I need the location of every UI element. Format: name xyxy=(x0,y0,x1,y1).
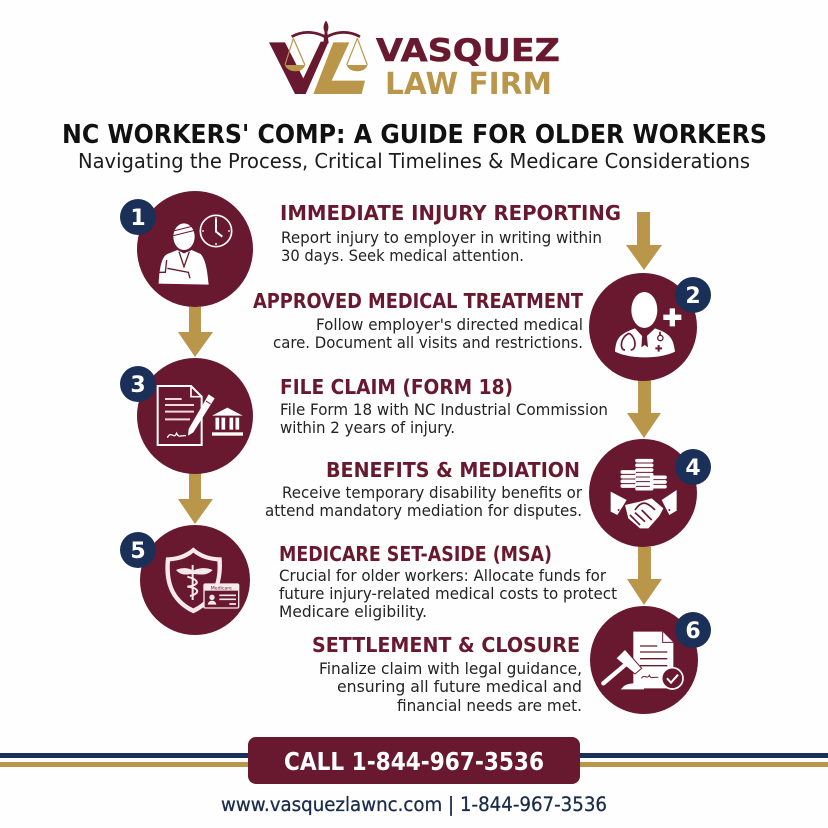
step 2 body: Follow employer's directed medical xyxy=(316,315,583,334)
step 6 icon circle xyxy=(590,606,698,714)
step 5 body: Medicare eligibility. xyxy=(279,602,427,621)
step 6 number badge: 6 xyxy=(685,619,701,644)
step 4 icon circle xyxy=(589,439,697,547)
step 2 heading: APPROVED MEDICAL TREATMENT xyxy=(253,289,583,313)
step 4 body: attend mandatory mediation for disputes. xyxy=(265,501,582,520)
icon: injured worker with clock xyxy=(159,215,232,285)
step 2 body: care. Document all visits and restrictions. xyxy=(273,333,583,352)
step 5 body xyxy=(279,566,617,621)
logo wordmark: Law Firm: LAW FIRM xyxy=(385,67,552,102)
icon: coin stacks and handshake xyxy=(611,461,677,528)
step 1 icon circle xyxy=(137,191,253,307)
logo mark: scales of justice with VL monogram xyxy=(269,21,367,94)
step 1 number badge xyxy=(120,199,156,235)
step 4 heading: BENEFITS & MEDIATION xyxy=(326,458,580,482)
step 4 body xyxy=(265,483,582,520)
step 5 number badge: 5 xyxy=(130,539,146,564)
step 5 heading: MEDICARE SET-ASIDE (MSA) xyxy=(279,542,552,566)
arrow: step 3 to step 5 xyxy=(178,473,213,524)
step 3 icon circle xyxy=(137,358,253,474)
step 6 heading: SETTLEMENT & CLOSURE xyxy=(312,633,580,657)
step 2 icon circle xyxy=(589,273,697,381)
step 4 number badge xyxy=(675,449,711,485)
step 3 body: File Form 18 with NC Industrial Commission xyxy=(280,400,608,419)
step 4 body: Receive temporary disability benefits or xyxy=(282,483,582,502)
logo wordmark: Vasquez: VASQUEZ xyxy=(376,33,560,69)
step 6 number badge xyxy=(675,612,711,648)
arrow: step 1 to step 3 xyxy=(178,307,213,357)
step 1 text xyxy=(280,201,621,265)
step 1 body: Report injury to employer in writing within xyxy=(281,228,602,247)
step 3 body xyxy=(280,400,608,437)
arrow: step 4 to step 6 xyxy=(627,547,662,605)
step 2 number badge: 2 xyxy=(685,284,701,309)
arrow: into step 2 xyxy=(626,212,662,270)
step 6 body: ensuring all future medical and xyxy=(337,677,582,696)
step 6 text xyxy=(312,633,582,715)
footer contact line: www.vasquezlawnc.com | 1-844-967-3536 xyxy=(221,793,607,816)
step 5 body: Crucial for older workers: Allocate funds for xyxy=(279,566,606,585)
step 2 body xyxy=(273,315,583,352)
icon: gavel, document and check mark xyxy=(603,632,683,689)
step 5 body: future injury-related medical costs to protect xyxy=(279,584,617,603)
step 5 number badge xyxy=(120,532,156,568)
logo: Vasquez Law Firm xyxy=(269,21,560,102)
step 3 number badge: 3 xyxy=(130,373,146,398)
step 1 body xyxy=(281,228,602,265)
call to action button: CALL 1-844-967-3536 xyxy=(284,747,544,776)
step 3 heading: FILE CLAIM (FORM 18) xyxy=(280,375,513,399)
step 1 body: 30 days. Seek medical attention. xyxy=(281,246,524,265)
step 2 number badge xyxy=(675,277,711,313)
step 6 body: Finalize claim with legal guidance, xyxy=(319,659,582,678)
step 6 body xyxy=(319,659,582,715)
call to action button xyxy=(248,737,580,784)
step 5 icon circle xyxy=(140,525,250,635)
step 3 text xyxy=(280,375,608,437)
arrow: step 2 to step 4 xyxy=(627,380,661,438)
step 5 text xyxy=(279,542,617,621)
subtitle: Navigating the Process, Critical Timelines & Medicare Considerations xyxy=(78,149,750,173)
step 6 body: financial needs are met. xyxy=(397,696,582,715)
step 4 number badge: 4 xyxy=(685,456,701,481)
step 1 heading: IMMEDIATE INJURY REPORTING xyxy=(280,201,621,225)
icon: claim form, pen and courthouse xyxy=(158,386,243,445)
icon: doctor with plus sign xyxy=(615,292,681,357)
step 4 text xyxy=(265,458,582,520)
step 2 text xyxy=(253,289,583,352)
title: NC WORKERS' COMP: A GUIDE FOR OLDER WORKERS xyxy=(62,120,767,150)
step 3 number badge xyxy=(120,366,156,402)
step 3 body: within 2 years of injury. xyxy=(280,418,455,437)
step 1 number badge: 1 xyxy=(130,206,146,231)
icon: medical shield and Medicare card: Medicare xyxy=(211,585,232,591)
